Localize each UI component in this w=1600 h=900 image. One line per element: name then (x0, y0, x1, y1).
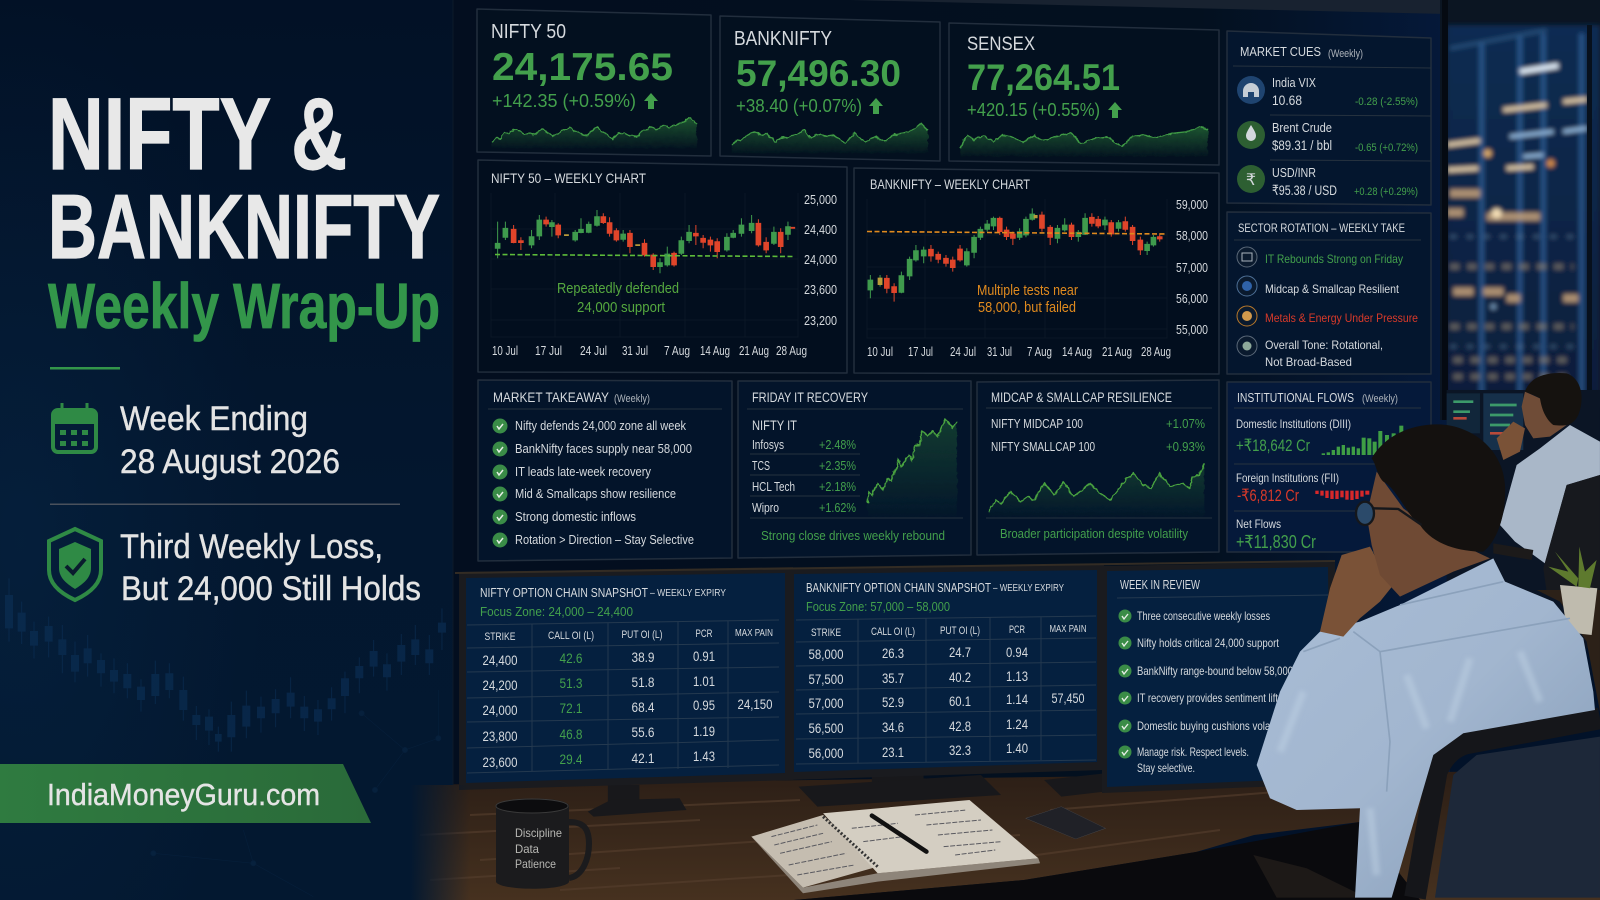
icon: shield (49, 529, 101, 600)
ear (1399, 515, 1415, 548)
monitor: Nifty option chain (459, 567, 793, 790)
monitor: Nifty option chain: CALL OI (L) (548, 630, 594, 642)
panel: BankNifty weekly chart: 28 Aug (1141, 344, 1171, 359)
fade panel into desk (410, 785, 470, 900)
panel: Nifty 50 weekly chart: 24,000 (804, 252, 837, 267)
mug: Patience (515, 857, 556, 871)
panel: midcap and smallcap resilience: MIDCAP & SMALLCAP RESILIENCE (991, 389, 1172, 405)
monitor: BankNifty option chain: CALL OI (L) (871, 626, 915, 638)
subtitle: Weekly Wrap-Up (48, 270, 440, 342)
panel: Nifty 50 weekly chart: 23,600 (804, 282, 837, 297)
key message (120, 528, 421, 608)
monitor: BankNifty option chain: 57,000 (808, 696, 844, 711)
panel: Friday IT recovery: +2.48% (819, 437, 856, 452)
icon: IT (1237, 247, 1257, 267)
second trader hair (1525, 373, 1582, 426)
card: BankNifty: BANKNIFTY (734, 28, 832, 50)
bullet checks (492, 418, 508, 548)
panel: institutional flows: INSTITUTIONAL FLOWS (1237, 390, 1354, 405)
monitor: BankNifty option chain: 1.14 (1006, 692, 1028, 707)
panel: midcap and smallcap resilience: +0.93% (1166, 439, 1205, 454)
monitor stands (588, 773, 1104, 817)
mug: Discipline (515, 826, 562, 840)
panel: BankNifty weekly chart: 58,000, but failed (978, 299, 1076, 316)
cue: India VIX: India VIX (1272, 75, 1316, 90)
panel: BankNifty weekly chart: 31 Jul (987, 344, 1012, 359)
panel: Nifty 50 weekly chart (478, 160, 847, 373)
panel: Nifty 50 weekly chart: NIFTY 50 – WEEKLY CHART (491, 170, 646, 186)
panel: midcap and smallcap resilience: NIFTY MIDCAP 100 (991, 416, 1083, 431)
panel: BankNifty weekly chart: 21 Aug (1102, 344, 1132, 359)
title: BANKNIFTY (48, 177, 440, 278)
panel: institutional flows: Net Flows (1236, 517, 1281, 531)
accent rule (50, 367, 120, 370)
resistance line: 58,000 (867, 232, 1167, 234)
panel: BankNifty weekly chart: 57,000 (1176, 260, 1208, 275)
monitor: BankNifty option chain: 57,450 (1052, 691, 1084, 706)
monitor: Nifty option chain: NIFTY OPTION CHAIN SNAPSHOT (480, 586, 648, 600)
monitor: BankNifty option chain: 1.13 (1006, 669, 1028, 684)
background network nodes (151, 690, 441, 897)
card: Sensex: 77,264.51 (967, 57, 1120, 98)
monitor: BankNifty option chain: 24.7 (949, 645, 971, 660)
panel: institutional flows: +₹11,830 Cr (1236, 532, 1316, 552)
table grid (467, 620, 779, 773)
monitor: Nifty option chain: – WEEKLY EXPIRY (650, 587, 726, 599)
card: Sensex: +420.15 (+0.55%) (967, 100, 1100, 120)
panel: institutional flows: -₹6,812 Cr (1237, 486, 1299, 505)
panel: BankNifty weekly chart (854, 168, 1219, 374)
monitor: Nifty option chain: 24,200 (482, 678, 518, 693)
monitor: Nifty option chain: 24,400 (482, 653, 518, 668)
panel: Nifty 50 weekly chart: 24,400 (804, 222, 837, 237)
panel: BankNifty weekly chart: 10 Jul (867, 344, 893, 359)
monitor: BankNifty option chain: 1.40 (1006, 741, 1028, 756)
monitor: BankNifty option chain: 34.6 (882, 720, 904, 735)
monitor: Nifty option chain: STRIKE (484, 631, 516, 643)
frame highlight above monitors (455, 560, 1335, 574)
panel: BankNifty weekly chart: 59,000 (1176, 197, 1208, 212)
monitor: BankNifty option chain: 57,500 (808, 672, 844, 687)
panel: BankNifty weekly chart: 14 Aug (1062, 344, 1092, 359)
panel: BankNifty weekly chart: 55,000 (1176, 322, 1208, 337)
icon: calendar (53, 403, 96, 452)
panel: BankNifty weekly chart: 56,000 (1176, 291, 1208, 306)
week ending: 28 August 2026 (120, 443, 340, 481)
key message: Third Weekly Loss, (120, 528, 383, 566)
panel: BankNifty weekly chart: 17 Jul (908, 344, 933, 359)
panel: Friday IT recovery: NIFTY IT (752, 417, 797, 433)
monitor: BankNifty option chain: 42.8 (949, 719, 971, 734)
monitor: week in review: WEEK IN REVIEW (1120, 577, 1201, 592)
monitor: BankNifty option chain: PCR (1009, 624, 1025, 636)
monitor: BankNifty option chain: PUT OI (L) (940, 625, 980, 637)
monitor: BankNifty option chain: 58,000 (808, 647, 844, 662)
banner: website (0, 764, 371, 823)
cue: USD/INR: +0.28 (+0.29%) (1354, 186, 1418, 198)
monitor: Nifty option chain: 1.43 (693, 749, 715, 764)
banner: website: IndiaMoneyGuru.com (47, 777, 320, 812)
panel: institutional flows: Foreign Institutions (FII) (1236, 471, 1339, 485)
candlestick chart: Nifty 50 (495, 210, 795, 273)
monitor: Nifty option chain: 1.19 (693, 724, 715, 739)
panel: market takeaway: Mid & Smallcaps show resilience (515, 487, 676, 501)
second chair (1543, 475, 1600, 592)
background office: second person and plant (1447, 373, 1600, 712)
background faded candlesticks (5, 578, 446, 752)
panel: Friday IT recovery: Infosys (752, 437, 784, 452)
monitor: BankNifty option chain: – WEEKLY EXPIRY (993, 582, 1064, 594)
line chart: midcap smallcap (989, 463, 1204, 517)
panel: sector rotation: IT Rebounds Strong on Friday (1265, 252, 1403, 266)
panel: Nifty 50 weekly chart: 10 Jul (492, 343, 518, 358)
monitor: Nifty option chain: 72.1 (560, 701, 582, 716)
cue: USD/INR (1237, 165, 1418, 198)
monitor: week in review: IT recovery provides sentiment lift (1137, 691, 1279, 705)
panel: BankNifty weekly chart: 24 Jul (950, 344, 976, 359)
monitor: BankNifty option chain: 40.2 (949, 670, 971, 685)
monitor: week in review: Three consecutive weekly losses (1137, 609, 1270, 623)
monitor: Nifty option chain: 1.01 (693, 674, 715, 689)
panel: institutional flows: Domestic Institutions (DIII) (1236, 417, 1351, 431)
panel: BankNifty weekly chart: 58,000 (1176, 228, 1208, 243)
monitor: BankNifty option chain: Focus Zone: 57,000 – 58,000 (806, 599, 950, 614)
panel: market takeaway: BankNifty faces supply near 58,000 (515, 442, 692, 456)
panel: Friday IT recovery: +1.62% (819, 500, 856, 515)
monitor: BankNifty option chain: BANKNIFTY OPTION CHAIN SNAPSHOT (806, 581, 991, 595)
monitor: BankNifty option chain (788, 564, 1104, 780)
panel: Nifty 50 weekly chart: 24 Jul (580, 343, 607, 358)
shirt (1257, 558, 1595, 898)
monitor: week in review (1102, 562, 1335, 793)
mug (496, 798, 589, 889)
top row: index cards (477, 9, 1219, 165)
cue: Brent Crude: $89.31 / bbl (1272, 137, 1332, 153)
panel: sector rotation: Metals & Energy Under Pressure (1265, 311, 1418, 325)
panel: sector rotation (1227, 212, 1431, 374)
left panel background (0, 0, 453, 900)
monitor: Nifty option chain: 23,800 (482, 729, 518, 744)
panel edge line (452, 0, 454, 785)
panel: midcap and smallcap resilience (977, 380, 1219, 555)
panel: Friday IT recovery: FRIDAY IT RECOVERY (752, 389, 869, 405)
monitor: Nifty option chain: 0.91 (693, 649, 715, 664)
monitor: BankNifty option chain: 1.24 (1006, 717, 1028, 732)
card: Sensex: SENSEX (967, 34, 1035, 55)
panel: Nifty 50 weekly chart: 21 Aug (739, 343, 769, 358)
second trader shirt (1500, 425, 1600, 563)
plant pot (1560, 585, 1597, 635)
desk right (1537, 590, 1600, 712)
panel: institutional flows: (Weekly) (1362, 393, 1398, 405)
left panel glow (0, 0, 410, 900)
monitor: Nifty option chain: PUT OI (L) (622, 629, 662, 641)
panel: Friday IT recovery: +2.35% (819, 458, 856, 473)
phone (1026, 807, 1106, 839)
second trader face (1522, 392, 1567, 438)
panel: market cues: MARKET CUES (1240, 44, 1321, 59)
cue: USD/INR: ₹95.38 / USD (1272, 182, 1337, 198)
monitor: BankNifty option chain: 52.9 (882, 695, 904, 710)
panel: Friday IT recovery (738, 381, 971, 558)
panel: sector rotation: Not Broad-Based (1265, 355, 1352, 369)
monitor: Nifty option chain: 0.95 (693, 698, 715, 713)
panel: BankNifty weekly chart: 7 Aug (1027, 344, 1052, 359)
panel: market takeaway: Rotation > Direction – Stay Selective (515, 533, 694, 547)
line chart: Nifty IT (867, 419, 957, 517)
monitor: week in review: Manage risk. Respect levels. (1137, 745, 1249, 759)
cue: India VIX: 10.68 (1272, 92, 1302, 108)
card: Nifty 50 (477, 9, 711, 156)
panel: Nifty 50 weekly chart: 17 Jul (535, 343, 562, 358)
title: NIFTY & (48, 77, 347, 191)
mug: Data (515, 842, 539, 856)
bullet checks (1118, 610, 1132, 758)
panel: midcap and smallcap resilience: +1.07% (1166, 416, 1205, 431)
monitor: Nifty option chain: 68.4 (632, 700, 655, 715)
monitor: Nifty option chain: 51.3 (560, 676, 582, 691)
notebook and pen (751, 800, 1040, 893)
panel: sector rotation: Overall Tone: Rotational, (1265, 338, 1383, 352)
monitor: Nifty option chain: 42.6 (560, 651, 582, 666)
card: BankNifty (720, 16, 940, 161)
icon: metals (1237, 306, 1257, 326)
support line: 24,000 (495, 254, 793, 256)
window with city view (1440, 0, 1600, 420)
icon: overall tone (1237, 336, 1257, 356)
monitor: BankNifty option chain: 32.3 (949, 743, 971, 758)
panel: market takeaway: (Weekly) (614, 393, 650, 405)
panel: Nifty 50 weekly chart: Repeatedly defended (557, 280, 679, 297)
monitor: BankNifty option chain: 26.3 (882, 646, 904, 661)
foreground trader (1253, 424, 1600, 898)
panel: Nifty 50 weekly chart: 7 Aug (664, 343, 690, 358)
panel: market cues: (Weekly) (1328, 48, 1363, 60)
candlestick chart: BankNifty (868, 208, 1162, 302)
panel: Nifty 50 weekly chart: 25,000 (804, 192, 837, 207)
monitor: BankNifty option chain: 56,000 (808, 746, 844, 761)
cue: USD/INR: USD/INR (1272, 165, 1316, 180)
monitor: BankNifty option chain: 0.94 (1006, 645, 1028, 660)
desk (410, 770, 1600, 900)
top frame strip (850, 0, 1447, 14)
panel: market takeaway: IT leads late-week recovery (515, 465, 652, 479)
panel: Friday IT recovery: Wipro (752, 500, 779, 515)
key message: But 24,000 Still Holds (121, 570, 421, 608)
monitor: Nifty option chain: 51.8 (632, 675, 654, 690)
panel: market takeaway (478, 380, 732, 561)
panel: sector rotation: SECTOR ROTATION – WEEKLY TAKE (1238, 221, 1405, 235)
monitor: Nifty option chain: 29.4 (560, 752, 583, 767)
monitor: Nifty option chain: 24,000 (482, 703, 518, 718)
bar chart: foreign flows (1315, 491, 1369, 500)
panel: Nifty 50 weekly chart: 24,000 support (577, 299, 666, 316)
hand and forearm (1320, 547, 1393, 637)
card: Nifty 50: NIFTY 50 (491, 21, 566, 43)
monitor: BankNifty option chain: 35.7 (882, 671, 904, 686)
monitor: Nifty option chain: MAX PAIN (735, 628, 773, 639)
panel: market takeaway: MARKET TAKEAWAY (493, 389, 610, 405)
panel: midcap and smallcap resilience: Broader participation despite volatility (1000, 526, 1188, 541)
card: BankNifty: +38.40 (+0.07%) (736, 96, 862, 116)
monitor: week in review: Domestic buying cushions volatility (1137, 719, 1287, 733)
panel: Friday IT recovery: TCS (752, 458, 770, 473)
panel: sector rotation: Midcap & Smallcap Resilient (1265, 282, 1400, 296)
panel: market takeaway: Nifty defends 24,000 zone all week (515, 419, 687, 433)
monitor: Nifty option chain: 46.8 (560, 727, 582, 742)
hair (1372, 424, 1505, 552)
monitor: BankNifty option chain: MAX PAIN (1050, 624, 1086, 635)
cue: USD/INR: ₹ (1246, 172, 1256, 189)
neck and face (1367, 472, 1490, 597)
panel: market takeaway: Strong domestic inflows (515, 510, 636, 524)
monitor: week in review: Stay selective. (1137, 761, 1195, 775)
monitor: BankNifty option chain: 56,500 (808, 721, 844, 736)
card: Nifty 50: 24,175.65 (492, 46, 673, 89)
monitor: Nifty option chain: 38.9 (632, 650, 654, 665)
panel: BankNifty weekly chart: Multiple tests near (977, 282, 1078, 299)
panel: institutional flows (1227, 382, 1431, 552)
chair (1253, 718, 1600, 898)
panel: Friday IT recovery: HCL Tech (752, 479, 795, 494)
panel: Friday IT recovery: Strong close drives weekly rebound (761, 528, 945, 543)
divider (50, 504, 400, 505)
cue: Brent Crude (1237, 120, 1418, 154)
panel: BankNifty weekly chart: BANKNIFTY – WEEKLY CHART (870, 176, 1030, 192)
panel: market cues (1227, 31, 1431, 205)
panel: Nifty 50 weekly chart: 23,200 (804, 313, 837, 328)
monitor: week in review: Nifty holds critical 24,000 support (1137, 636, 1280, 650)
panel: Nifty 50 weekly chart: 14 Aug (700, 343, 730, 358)
title (48, 77, 440, 278)
card: Nifty 50: +142.35 (+0.59%) (492, 91, 636, 111)
panel: Nifty 50 weekly chart: 28 Aug (776, 343, 807, 358)
week ending: Week Ending (120, 400, 308, 438)
monitor: week in review: BankNifty range-bound below 58,000 (1137, 664, 1293, 678)
glasses (1356, 502, 1422, 525)
monitor: Nifty option chain: 42.1 (632, 751, 654, 766)
monitor: BankNifty option chain: 23.1 (882, 745, 904, 760)
monitor: Nifty option chain: 55.6 (632, 725, 654, 740)
panel: Friday IT recovery: +2.18% (819, 479, 856, 494)
card: BankNifty: 57,496.30 (736, 53, 901, 94)
bar chart: domestic flows (1322, 426, 1403, 455)
dashboard wall background (450, 0, 1450, 800)
table grid (796, 616, 1096, 764)
card: Sensex (949, 23, 1219, 165)
panel: midcap and smallcap resilience: NIFTY SMALLCAP 100 (991, 439, 1095, 454)
week ending (120, 400, 340, 481)
monitor: BankNifty option chain: 60.1 (949, 694, 971, 709)
icon: midcap (1237, 276, 1257, 296)
monitor: BankNifty option chain: STRIKE (811, 627, 841, 639)
monitor: Nifty option chain: Focus Zone: 24,000 – 24,400 (480, 604, 633, 619)
monitor: Nifty option chain: PCR (696, 628, 713, 640)
panel: institutional flows: +₹18,642 Cr (1236, 436, 1310, 455)
panel: Nifty 50 weekly chart: 31 Jul (622, 343, 648, 358)
cue: India VIX: -0.28 (-2.55%) (1355, 96, 1418, 108)
cue: India VIX (1237, 75, 1418, 108)
monitor: Nifty option chain: 23,600 (482, 755, 518, 770)
monitor: Nifty option chain: 24,150 (738, 697, 772, 712)
cue: Brent Crude: Brent Crude (1272, 120, 1332, 135)
cue: Brent Crude: -0.65 (+0.72%) (1355, 142, 1418, 154)
